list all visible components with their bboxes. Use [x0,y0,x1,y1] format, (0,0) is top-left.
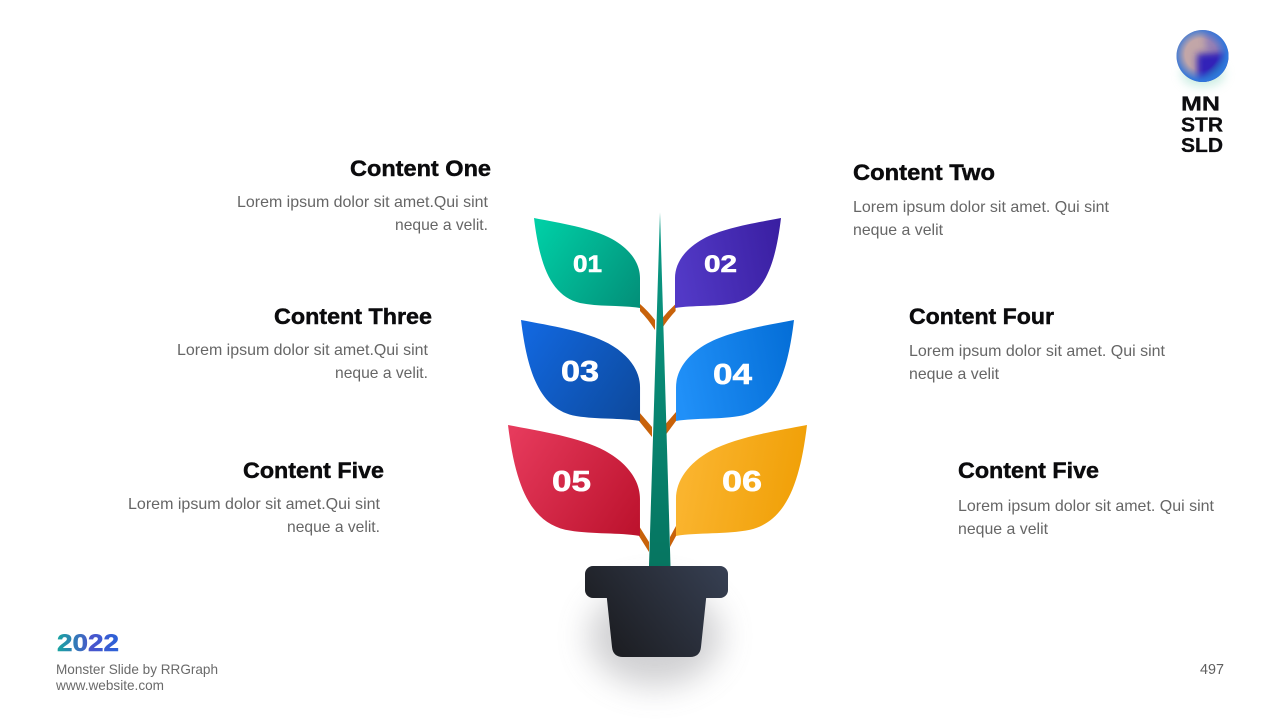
leaf 06: 06 [722,466,762,498]
text block: content five right [958,458,1215,538]
leaf 04 [676,320,794,421]
credits: Monster Slide by RRGraph [56,661,218,677]
text block: content two [853,160,1110,239]
text block: content two: Lorem ipsum dolor sit amet. Qui sint [853,199,1110,216]
text block: content three: Content Three [274,304,432,329]
logo: sphere and wordmark [1176,30,1228,152]
text block: content five left: Content Five [243,458,384,483]
text block: content one [237,156,491,234]
text block: content four: Lorem ipsum dolor sit amet. Qui sint [909,343,1166,360]
leaf 03: 03 [561,356,599,388]
leaf 03 [521,320,640,421]
text block: content three: Lorem ipsum dolor sit amet.Qui sint [177,342,429,359]
text block: content five left: neque a velit. [287,519,380,536]
pot shadow [589,586,721,686]
wordmark: STR [1181,114,1224,136]
leaf 02: 02 [704,251,737,278]
wordmark: MN [1181,94,1220,116]
leaf 05 [508,425,640,536]
year: 2022 [57,630,119,657]
text block: content four: Content Four [909,304,1054,329]
text block: content three: neque a velit. [335,365,428,382]
text block: content two: Content Two [853,160,995,185]
text block: content one: Lorem ipsum dolor sit amet.Qui sint [237,194,489,211]
leaf 01 [534,218,640,308]
text block: content five left [128,458,384,536]
text block: content four: neque a velit [909,366,1000,383]
page number: 497 [1200,662,1224,678]
credits: www.website.com [55,677,164,693]
text block: content five right: Lorem ipsum dolor sit amet. Qui sint [958,498,1215,515]
leaf 06 [676,425,807,536]
leaf 01: 01 [573,251,602,278]
plant illustration [508,212,807,686]
text block: content three [177,304,432,382]
leaf 05: 05 [552,466,591,498]
text block: content five right: Content Five [958,458,1099,483]
stem [649,212,670,566]
credits [55,661,218,693]
branches [639,304,676,552]
text block: content one: Content One [350,156,491,181]
text block: content one: neque a velit. [395,217,488,234]
footer: year and credits [55,630,218,693]
text block: content five right: neque a velit [958,521,1049,538]
pot [585,566,728,657]
text block: content four [909,304,1166,383]
leaf 04: 04 [713,359,752,391]
icon: sphere [1176,30,1228,92]
wordmark: SLD [1181,135,1223,157]
text block: content five left: Lorem ipsum dolor sit amet.Qui sint [128,496,381,513]
leaf 02 [675,218,781,308]
text block: content two: neque a velit [853,222,944,239]
wordmark [1181,94,1224,157]
